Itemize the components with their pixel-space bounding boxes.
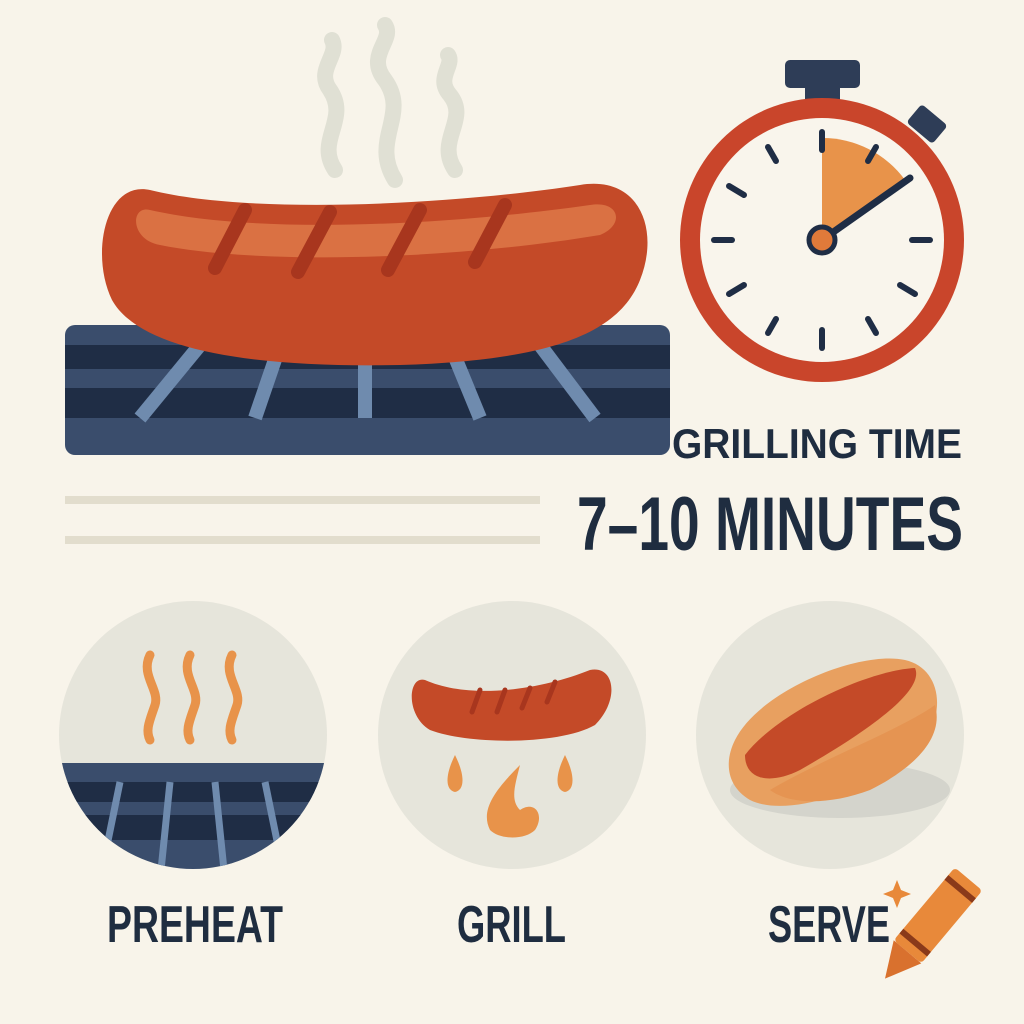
icon: stopwatch [680, 60, 964, 382]
icon: grill grate [65, 325, 670, 455]
label: serve: SERVE [768, 896, 890, 954]
panel: serve [696, 601, 964, 954]
label: preheat: PREHEAT [107, 896, 283, 954]
icon: big sausage [102, 184, 648, 365]
label: grill: GRILL [457, 896, 566, 954]
icon: crayon [835, 837, 982, 990]
panel: grill [378, 601, 646, 954]
heading: grilling time: GRILLING TIME [672, 420, 962, 467]
icon: steam wisps [325, 25, 456, 180]
panel: preheat [59, 601, 327, 942]
